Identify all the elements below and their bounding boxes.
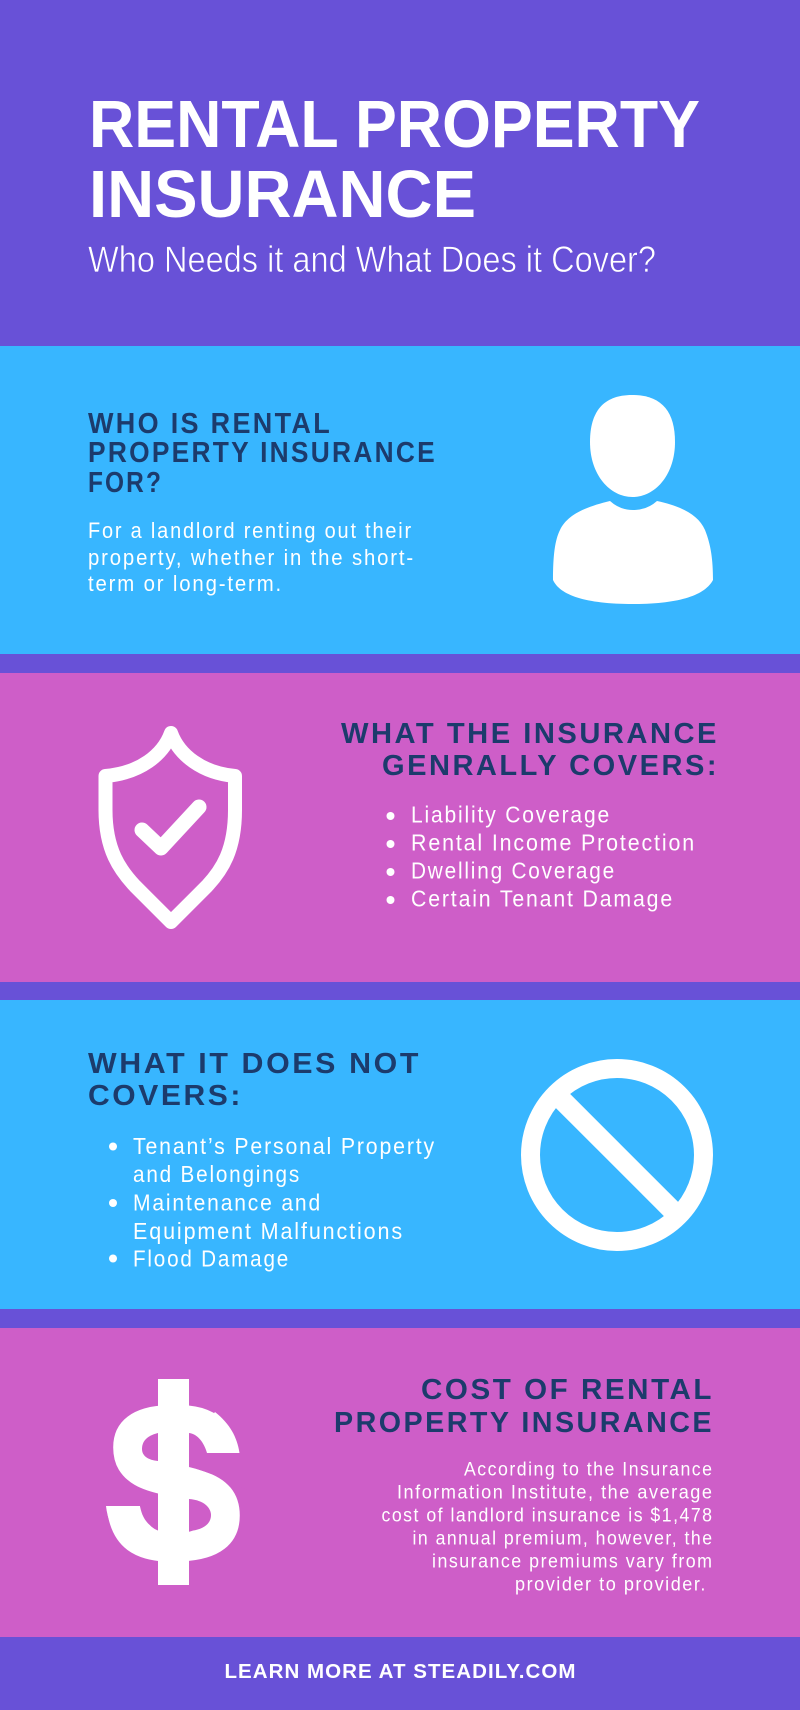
body text [88,518,415,596]
list: covered items: Certain Tenant Damage [411,886,674,912]
list: excluded items: Equipment Malfunctions [133,1218,404,1244]
list: covered items: Liability Coverage [411,802,611,828]
title [89,87,700,232]
header panel [88,87,700,280]
heading: cost of rental property insurance: PROPERTY INSURANCE [334,1407,714,1439]
icon: dollar sign: $ [108,1356,240,1609]
list: excluded items: Maintenance and [133,1190,322,1216]
list: excluded items [109,1133,436,1272]
heading: what the insurance generally covers [341,718,719,782]
body text: provider to provider. [515,1574,707,1596]
body text: For a landlord renting out their [88,518,413,543]
panel: what it covers [0,673,800,982]
icon: shield with check [106,733,235,922]
panel: cost [0,1328,800,1637]
panel: what it does not cover [0,1000,800,1309]
icon: prohibited sign [530,1068,704,1242]
heading: what it does not cover [88,1048,421,1112]
title: RENTAL PROPERTY [89,87,700,162]
list: excluded items: Tenant’s Personal Property [133,1133,436,1159]
subtitle: Who Needs it and What Does it Cover? [88,239,656,280]
footer: LEARN MORE AT STEADILY.COM [224,1661,576,1683]
heading: who is rental property insurance for: FOR? [88,467,163,499]
body text: property, whether in the short- [88,545,415,570]
body text: Information Institute, the average [397,1482,714,1504]
heading: what the insurance generally covers: GENRALLY COVERS: [382,750,719,782]
heading: what it does not cover: WHAT IT DOES NOT [88,1048,421,1080]
icon: person [553,395,713,604]
list: covered items: Dwelling Coverage [411,858,616,884]
heading: who is rental property insurance for: WHO IS RENTAL [88,408,332,440]
body text: According to the Insurance [464,1460,714,1480]
panel: who is it for [0,346,800,654]
body text: cost of landlord insurance is $1,478 [382,1506,714,1526]
heading: cost of rental property insurance [334,1374,714,1439]
heading: what it does not cover: COVERS: [88,1080,243,1112]
body text [382,1460,714,1596]
heading: cost of rental property insurance: COST OF RENTAL [421,1374,714,1406]
body text: insurance premiums vary from [432,1552,714,1572]
list: covered items [386,802,696,912]
heading: who is rental property insurance for: PROPERTY INSURANCE [88,437,437,469]
body text: in annual premium, however, the [412,1528,714,1550]
heading: what the insurance generally covers: WHAT THE INSURANCE [341,718,719,750]
list: covered items: Rental Income Protection [411,830,696,856]
title: INSURANCE [89,157,476,232]
list: excluded items: and Belongings [133,1161,301,1187]
heading: who is rental property insurance for [88,408,437,499]
body text: term or long-term. [88,571,283,596]
list: excluded items: Flood Damage [133,1246,290,1272]
